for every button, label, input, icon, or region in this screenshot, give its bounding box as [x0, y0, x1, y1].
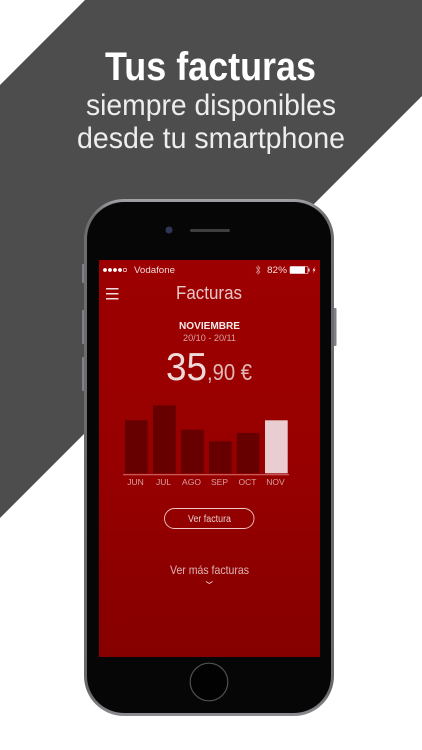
- month labels: [127, 477, 285, 487]
- headline text: [77, 45, 345, 155]
- screen background: [99, 260, 320, 657]
- date range: 20/10 - 20/11: [183, 333, 236, 344]
- amount: [166, 346, 252, 389]
- chevron icon: [206, 582, 213, 584]
- background grey diagonal band: [0, 0, 422, 518]
- front camera: [166, 226, 172, 234]
- status bar: [103, 265, 315, 275]
- baseline: [123, 474, 289, 475]
- bluetooth icon: [256, 266, 260, 274]
- bar chart: [123, 405, 289, 487]
- menu icon: [106, 288, 118, 300]
- link: Ver más facturas: Ver más facturas: [170, 563, 249, 577]
- button: Ver factura: [164, 508, 254, 528]
- amount integer: 35: [166, 346, 207, 389]
- month labels: JUN: [127, 477, 144, 487]
- smartphone: [82, 199, 336, 716]
- phone side buttons: [82, 264, 336, 391]
- amount decimals: ,90 €: [207, 359, 252, 385]
- title: Tus facturas: Tus facturas: [105, 45, 316, 89]
- speaker: [190, 229, 230, 232]
- battery: [290, 266, 310, 274]
- phone front glass: [87, 202, 331, 713]
- screen: [99, 260, 320, 657]
- button: Ver factura: Ver factura: [188, 514, 231, 525]
- month labels: OCT: [239, 477, 256, 487]
- month labels: JUL: [156, 477, 171, 487]
- month labels: SEP: [211, 477, 228, 487]
- month heading: NOVIEMBRE: [179, 320, 240, 332]
- phone body: [84, 199, 334, 716]
- screen title: Facturas: [176, 282, 242, 303]
- month labels: AGO: [182, 477, 201, 487]
- battery percentage: 82%: [267, 265, 287, 275]
- signal dots: [103, 268, 127, 272]
- subtitle line 2: desde tu smartphone: [77, 122, 345, 155]
- home button: [190, 663, 228, 701]
- month labels: NOV: [266, 477, 285, 487]
- carrier: Vodafone: [134, 265, 175, 275]
- charging bolt: [312, 266, 316, 274]
- bars: [125, 405, 259, 473]
- subtitle line 1: siempre disponibles: [86, 89, 336, 122]
- highlighted bar: [265, 420, 288, 473]
